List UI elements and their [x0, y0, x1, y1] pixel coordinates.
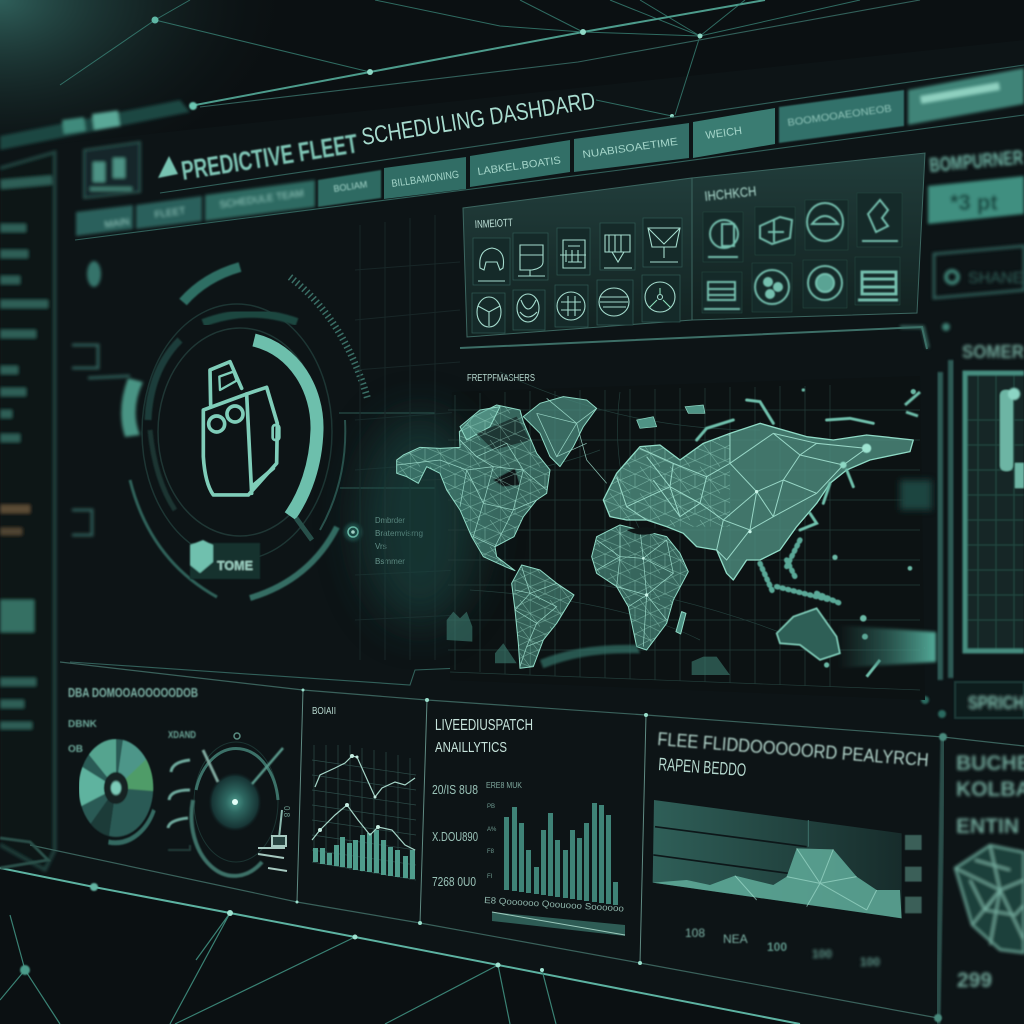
panel: world map [360, 372, 936, 700]
analytics stats: X.DOU890 [432, 829, 478, 844]
icon: title warning triangle [158, 156, 178, 178]
dial gauge [191, 733, 291, 876]
bar chart footer: E8 Qoooooo Qoouooo Soooooo [484, 895, 624, 914]
analytics heading: ANAILLYTICS [435, 739, 507, 756]
area chart axis labels: 100 [812, 947, 832, 961]
icon glyphs: group two [704, 200, 898, 309]
analytics stats: 20/IS 8U8 [432, 782, 478, 797]
area chart axis labels [685, 926, 880, 969]
bar chart heading: ERE8 MUK [486, 781, 523, 790]
map: eurasia [603, 423, 913, 597]
frame lines [70, 0, 1024, 685]
bar chart [504, 803, 618, 905]
area chart heading: FLEE FLIDDOOOOORD PEALYRCH [657, 729, 929, 770]
panel: icon group one [463, 178, 692, 337]
panel: live dispatch analytics: PB [487, 804, 495, 810]
chart lines [312, 756, 415, 850]
gauge note: Vrs [375, 542, 387, 551]
left navigation column [0, 152, 55, 870]
navigation tabs: BOLIAM [333, 179, 368, 194]
bottom heading: DBA DOMOOAOOOOODOB [68, 685, 198, 700]
faint grid behind gauge and map [355, 215, 460, 660]
donut chart [92, 756, 154, 843]
area chart axis labels: 108 [685, 926, 705, 940]
panel: bottom status with donut and dial: XDAND [168, 730, 196, 741]
panel: bottom status with donut and dial [30, 662, 1024, 1018]
navigation tabs: MAIN [104, 217, 130, 231]
analytics heading: LIVEEDIUSPATCH [435, 717, 533, 734]
panel: live dispatch analytics [432, 713, 648, 965]
icon: fleet bag [203, 362, 279, 495]
map: right glow band [838, 625, 936, 668]
title [179, 87, 597, 186]
chart grid [312, 745, 416, 880]
map: blurred east asia and oceania [697, 388, 916, 677]
navigation tabs: WEICH [705, 125, 743, 142]
area chart heading: RAPEN BEDDO [658, 754, 747, 780]
map heading: FRETPFMASHERS [467, 373, 535, 384]
map: left mesh [397, 398, 673, 667]
panel: right chart [921, 360, 1024, 718]
navigation tabs: LABKEL.BOATIS [477, 154, 562, 178]
gauge note [375, 516, 423, 566]
navigation tabs: FLEET [154, 206, 186, 221]
icon tiles: group two [702, 193, 902, 313]
gauge note: Dmbrder [375, 516, 405, 525]
analytics stats [432, 782, 478, 889]
gauge note: Bsmmer [375, 557, 405, 566]
title: SCHEDULING DASHDARD [360, 87, 597, 151]
area chart axis labels: NEA [723, 932, 748, 946]
gauge rings [121, 267, 368, 598]
network lines: top [60, 0, 860, 118]
map grid [420, 372, 920, 690]
gauge label [190, 540, 260, 579]
icon tiles: group one [472, 218, 682, 333]
area chart axis labels: 100 [860, 955, 880, 969]
gauge connector node [339, 413, 435, 541]
gauge label: TOME [217, 558, 253, 573]
map: left continents [397, 397, 705, 668]
navigation tabs: SCHEDULE TEAM [219, 188, 305, 211]
panel: right stat column [900, 147, 1024, 362]
area chart axis labels: 100 [767, 940, 787, 954]
panel: right stat column: SHANE [968, 270, 1023, 287]
map side glow [360, 415, 480, 625]
panel: icon group two [692, 153, 925, 320]
panel: bottom status with donut and dial: DBNK [68, 719, 98, 730]
panel: bottom status with donut and dial: OB [68, 744, 83, 755]
navigation tabs [76, 68, 1024, 236]
gauge note: Bratemvisrng [375, 529, 423, 538]
panel: far right blurred column: 299 [957, 969, 992, 992]
dim blurred bar above title [0, 100, 190, 150]
corner glow [0, 0, 300, 190]
header logo tile [84, 142, 140, 198]
panel: right stat column: *3 pt [950, 190, 998, 215]
panel: live dispatch analytics: F8 [487, 849, 495, 855]
panel: live dispatch analytics: A% [487, 827, 497, 833]
panel: far right blurred column [955, 752, 1024, 992]
analytics stats: 7268 0U0 [432, 874, 476, 889]
gauge list brackets [168, 760, 190, 850]
area chart [653, 800, 922, 918]
panel: live dispatch analytics: FI [487, 874, 493, 880]
panel one heading: INMEIOTT [475, 217, 513, 231]
map: small area spikes [447, 612, 730, 675]
panel two heading: IHCHKCH [704, 183, 757, 204]
dial gauge: 0.8 [282, 806, 291, 818]
panel: line and bar combo chart [296, 688, 429, 925]
title: PREDICTIVE FLEET [179, 128, 360, 186]
panel: main gauge [72, 261, 435, 598]
analytics heading [435, 717, 533, 756]
navigation tabs: BOOMOOAEONEOB [787, 102, 892, 129]
icon glyphs: group one [477, 228, 680, 327]
navigation tabs: NUABISOAETIME [582, 136, 678, 161]
combo chart heading: BOIAII [312, 706, 336, 717]
navigation tabs: BILLBAMONING [391, 169, 460, 190]
panel: far right blurred column: ENTIN [956, 815, 1019, 838]
panel: fleet area chart [653, 729, 947, 1024]
chart bars [313, 830, 415, 879]
network lines: bottom [0, 838, 800, 1024]
map: dense mesh [397, 405, 688, 668]
